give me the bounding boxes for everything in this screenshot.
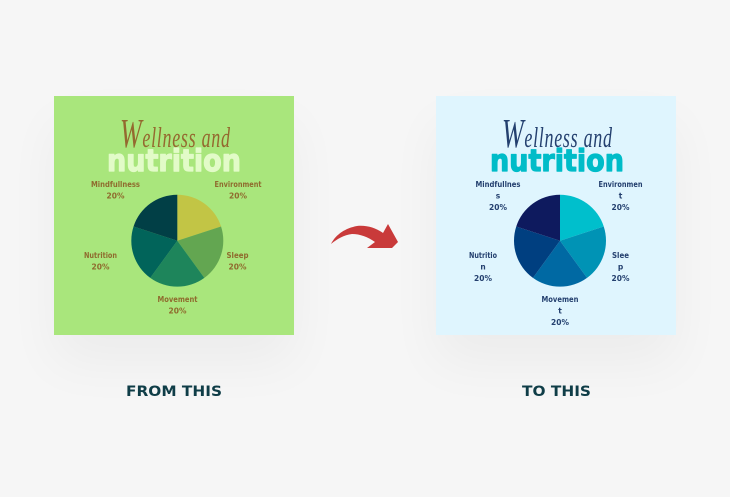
label: Mindfullness <box>91 180 140 200</box>
label: Mindfullness: s <box>496 192 501 200</box>
label: Mindfullness <box>476 180 521 212</box>
label: Nutrition: 20% <box>474 274 492 283</box>
label: Movement: Movemen <box>542 295 578 304</box>
label: Movement: 20% <box>169 306 187 316</box>
label: Sleep: 20% <box>229 262 247 272</box>
label: Mindfullness: Mindfullness <box>91 180 140 189</box>
heading: nutrition: nutrition <box>107 144 241 179</box>
label: Mindfullness: 20% <box>489 203 507 212</box>
label: Environment <box>214 180 262 200</box>
pie chart: green <box>131 195 223 287</box>
label: Sleep: 20% <box>612 274 630 283</box>
label: Nutrition <box>84 251 117 272</box>
label: Sleep: Sleep <box>226 251 249 260</box>
heading: nutrition: nutrition <box>490 144 624 179</box>
label: Environment: 20% <box>612 203 630 212</box>
panel: green version <box>84 110 262 316</box>
label: Movement: 20% <box>551 318 569 327</box>
caption: TO THIS: TO THIS <box>522 384 591 400</box>
arrow <box>331 224 398 248</box>
label: Mindfullness: Mindfullnes <box>476 180 521 189</box>
heading: Wellness and: Wellness and <box>120 110 231 157</box>
pie chart: blue <box>514 195 606 287</box>
label: Environment: Environmen <box>598 180 642 189</box>
label: Sleep: p <box>618 262 624 272</box>
panel: blue version <box>469 110 642 327</box>
heading: Wellness and: Wellness and <box>502 110 613 157</box>
caption: FROM THIS: FROM THIS <box>126 384 222 400</box>
label: Environment: t <box>619 192 623 200</box>
label: Movement <box>542 295 578 327</box>
label: Sleep: Slee <box>612 251 629 260</box>
panel background: green card <box>54 96 294 335</box>
label: Movement: t <box>558 306 562 316</box>
label: Nutrition <box>469 251 497 283</box>
label: Movement <box>158 295 198 316</box>
label: Nutrition: n <box>480 262 486 272</box>
label: Nutrition: 20% <box>92 262 110 272</box>
label: Environment: Environment <box>214 180 262 189</box>
label: Sleep <box>226 251 249 272</box>
label: Nutrition: Nutrition <box>84 251 117 260</box>
label: Movement: Movement <box>158 295 198 304</box>
panel background: blue card <box>436 96 676 335</box>
label: Environment <box>598 180 642 212</box>
label: Nutrition: Nutritio <box>469 251 497 260</box>
label: Mindfullness: 20% <box>107 192 125 200</box>
label: Sleep <box>612 251 630 283</box>
label: Environment: 20% <box>229 192 247 200</box>
